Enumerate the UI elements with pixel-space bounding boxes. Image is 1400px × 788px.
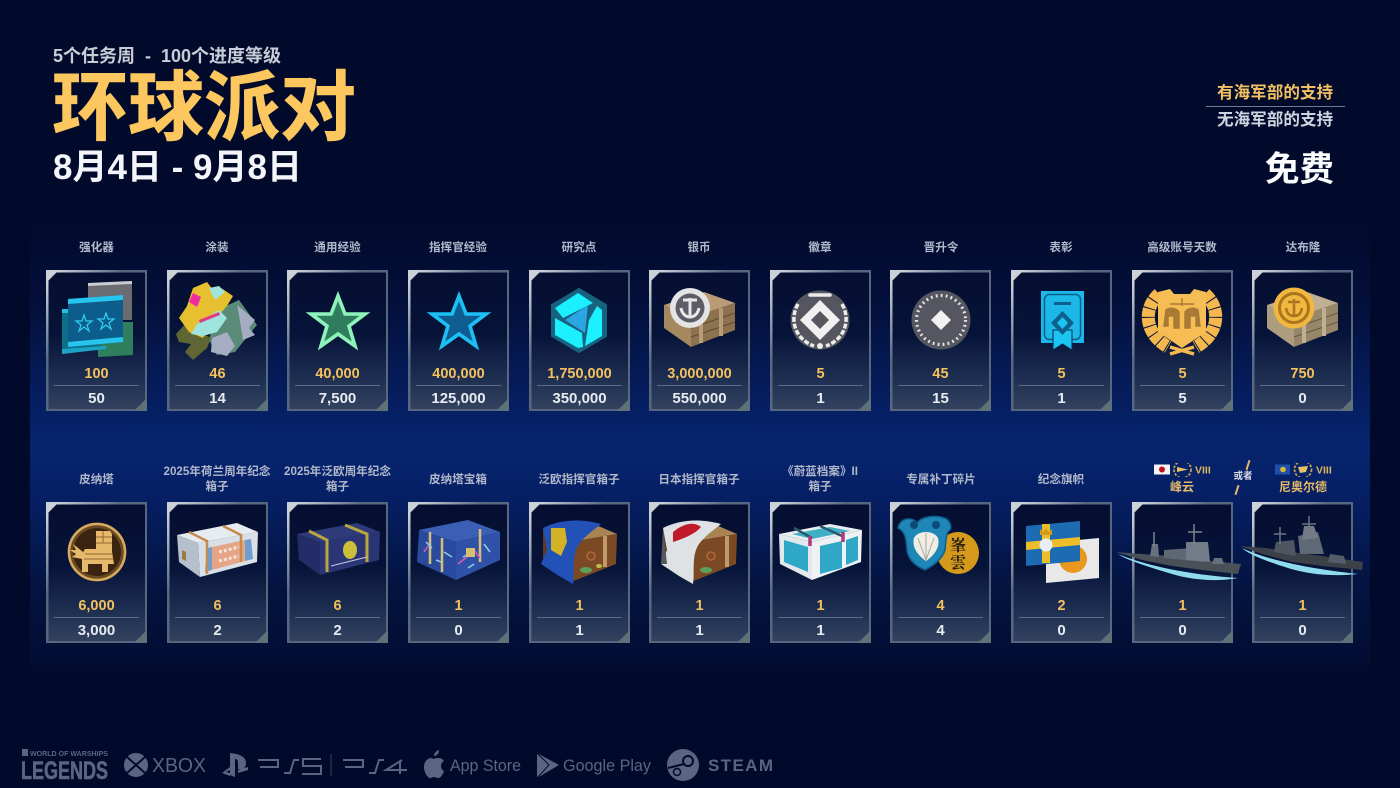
card: 峰云 xyxy=(1132,502,1233,643)
icon: premium laurel shield xyxy=(1142,289,1222,356)
card: 表彰 xyxy=(1011,270,1112,411)
value: with admiralty: 100 xyxy=(84,366,109,382)
value: free: 1 xyxy=(816,390,825,407)
label: 皮纳塔宝箱: 皮纳塔宝箱 xyxy=(429,472,487,486)
icon: Pan-European flag and tier: VIII xyxy=(1316,464,1332,476)
icon: Pan-European commander crate xyxy=(541,520,617,584)
icon: camouflage xyxy=(176,282,257,360)
logo: Steam: STEAM xyxy=(708,756,773,775)
icon: destroyer Minegumo xyxy=(1116,524,1241,580)
logo: World of Warships Legends: LEGENDS xyxy=(21,757,108,785)
label: 达布隆: 达布隆 xyxy=(1286,241,1320,254)
icon: commemorative flags xyxy=(1026,521,1099,583)
icon: pinata chest xyxy=(417,520,500,580)
value: free: 350,000 xyxy=(552,390,607,407)
value: free: 4 xyxy=(936,622,945,639)
value: free: 0 xyxy=(1178,622,1187,639)
value: free: 0 xyxy=(1298,622,1307,639)
label: 2025年荷兰周年纪念箱子 xyxy=(164,464,270,493)
card: 尼奥尔德 xyxy=(1252,502,1353,643)
value: free: 15 xyxy=(932,390,949,407)
value: with admiralty: 3,000,000 xyxy=(667,366,732,382)
value: with admiralty: 750 xyxy=(1290,366,1315,382)
icon: green star xyxy=(306,291,370,350)
value: with admiralty: 1 xyxy=(816,598,825,614)
value: with admiralty: 5 xyxy=(1057,366,1066,382)
date range: 8月4日 - 9月8日 xyxy=(53,148,302,187)
value: with admiralty: 6 xyxy=(213,598,222,614)
logo: PS5 and PS4 xyxy=(222,753,407,777)
label: 专属补丁碎片: 专属补丁碎片 xyxy=(906,472,976,486)
card: 皮纳塔 xyxy=(46,502,147,643)
card: 徽章 xyxy=(770,270,871,411)
label: 2025年泛欧周年纪念箱子 xyxy=(284,464,391,493)
card: 涂装 xyxy=(167,270,268,411)
legend: without admiralty: 无海军部的支持 xyxy=(1217,110,1333,129)
value: free: 0 xyxy=(1057,622,1066,639)
icon: credits crate xyxy=(664,288,736,347)
or text: 或者 xyxy=(1233,471,1252,482)
label: 2025年荷兰周年纪念箱子: 箱子 xyxy=(205,480,229,493)
card: 研究点 xyxy=(529,270,630,411)
card: 指挥官经验 xyxy=(408,270,509,411)
card: 泛欧指挥官箱子 xyxy=(529,502,630,643)
value: with admiralty: 40,000 xyxy=(315,366,360,382)
platform logos xyxy=(21,749,773,785)
legend: tier rows xyxy=(1206,83,1345,129)
background band xyxy=(30,215,1370,675)
legend: with admiralty: 有海军部的支持 xyxy=(1217,83,1333,102)
icon: blue star xyxy=(426,291,492,350)
icon: research hexagon xyxy=(551,288,607,353)
icon: cruiser Njord xyxy=(1240,516,1363,576)
label: 2025年荷兰周年纪念箱子: 2025年荷兰周年纪念 xyxy=(164,465,270,478)
icon: patch fragments xyxy=(897,516,979,574)
label: 指挥官经验: 指挥官经验 xyxy=(429,241,487,254)
value: with admiralty: 400,000 xyxy=(432,366,485,382)
icon: pinata coin xyxy=(68,522,126,582)
logo: App Store xyxy=(424,750,521,778)
value: with admiralty: 1 xyxy=(695,598,704,614)
logo: Xbox: XBOX xyxy=(152,755,206,777)
value: free: 5 xyxy=(1178,390,1187,407)
logo: Google Play xyxy=(537,753,651,778)
label: 高级账号天数: 高级账号天数 xyxy=(1147,241,1217,254)
logo: World of Warships Legends xyxy=(21,749,108,785)
logo: App Store: App Store xyxy=(450,756,521,775)
value: with admiralty: 46 xyxy=(209,366,226,382)
icon: boosters xyxy=(62,281,133,357)
card: 晋升令 xyxy=(890,270,991,411)
value: with admiralty: 6,000 xyxy=(78,598,115,614)
value: free: 14 xyxy=(209,390,226,407)
or divider xyxy=(1233,460,1252,496)
card: 纪念旗帜 xyxy=(1011,502,1112,643)
icon: emblem medal xyxy=(790,290,850,350)
value: with admiralty: 4 xyxy=(936,598,945,614)
label: 2025年泛欧周年纪念箱子: 2025年泛欧周年纪念 xyxy=(284,465,391,478)
label: 通用经验: 通用经验 xyxy=(314,241,361,254)
card: 《蔚蓝档案》II 箱子 xyxy=(770,502,871,643)
value: with admiralty: 5 xyxy=(1178,366,1187,382)
label: 表彰: 表彰 xyxy=(1049,241,1073,254)
value: with admiralty: 6 xyxy=(333,598,342,614)
icon: Japanese commander crate xyxy=(661,520,737,584)
icon: promotion order xyxy=(912,290,970,350)
card: 2025年荷兰周年纪念箱子 xyxy=(167,502,268,643)
icon: Dutch anniversary chest xyxy=(177,523,258,577)
label: 徽章: 徽章 xyxy=(808,241,832,254)
ship header: 峰云 xyxy=(1154,463,1211,494)
value: with admiralty: 1 xyxy=(454,598,463,614)
icon: Pan-European anniversary chest xyxy=(297,523,380,575)
label: 2025年泛欧周年纪念箱子: 箱子 xyxy=(326,480,349,493)
icon: Japan flag and tier: VIII xyxy=(1195,464,1211,476)
ship name: 尼奥尔德 xyxy=(1279,480,1327,494)
value: free: 7,500 xyxy=(319,390,356,407)
card: 达布隆 xyxy=(1252,270,1353,411)
icon: patch fragments: 雲 xyxy=(950,550,966,573)
card: 高级账号天数 xyxy=(1132,270,1233,411)
label: 银币: 银币 xyxy=(687,241,711,254)
value: free: 2 xyxy=(213,622,222,639)
free label: 免费 xyxy=(1265,151,1334,189)
label: 皮纳塔: 皮纳塔 xyxy=(79,472,114,486)
label: 纪念旗帜: 纪念旗帜 xyxy=(1038,472,1084,486)
icon: patch fragments: 峯 xyxy=(950,533,966,556)
card: 日本指挥官箱子 xyxy=(649,502,750,643)
value: free: 3,000 xyxy=(78,622,115,639)
value: free: 0 xyxy=(454,622,463,639)
value: free: 1 xyxy=(1057,390,1066,407)
value: free: 1 xyxy=(816,622,825,639)
value: with admiralty: 1 xyxy=(575,598,584,614)
value: with admiralty: 2 xyxy=(1057,598,1066,614)
label: 《蔚蓝档案》II 箱子 xyxy=(782,465,858,493)
card: 2025年泛欧周年纪念箱子 xyxy=(287,502,388,643)
card: 通用经验 xyxy=(287,270,388,411)
card: 专属补丁碎片 xyxy=(890,502,991,643)
icon: commendation certificate xyxy=(1041,291,1084,350)
value: free: 0 xyxy=(1298,390,1307,407)
ship name: 峰云 xyxy=(1170,480,1194,494)
label: 强化器: 强化器 xyxy=(79,241,114,254)
label: 涂装: 涂装 xyxy=(205,241,229,254)
icon: doubloons crate xyxy=(1267,288,1338,347)
value: with admiralty: 1 xyxy=(1178,598,1187,614)
value: with admiralty: 5 xyxy=(816,366,825,382)
title: 环球派对 xyxy=(52,66,356,151)
value: with admiralty: 45 xyxy=(932,366,949,382)
logo: Steam xyxy=(667,749,773,781)
label: 日本指挥官箱子: 日本指挥官箱子 xyxy=(658,472,740,486)
logo: Xbox xyxy=(124,753,206,777)
label: 研究点: 研究点 xyxy=(562,241,596,254)
value: free: 550,000 xyxy=(672,390,727,407)
icon: Pan-European flag and tier xyxy=(1275,463,1332,477)
label: 晋升令: 晋升令 xyxy=(924,241,958,254)
value: free: 1 xyxy=(695,622,704,639)
icon: Japan flag and tier xyxy=(1154,463,1211,477)
ship header: 尼奥尔德 xyxy=(1275,463,1332,494)
value: free: 50 xyxy=(88,390,105,407)
value: free: 125,000 xyxy=(431,390,486,407)
icon: Blue Archive chest xyxy=(779,524,862,580)
card: 皮纳塔宝箱 xyxy=(408,502,509,643)
label: 《蔚蓝档案》II 箱子: 箱子 xyxy=(808,480,832,493)
value: with admiralty: 1 xyxy=(1298,598,1307,614)
logo: Google Play: Google Play xyxy=(563,756,651,775)
value: free: 2 xyxy=(333,622,342,639)
logo: World of Warships Legends: WORLD OF WARSHIPS xyxy=(30,749,108,758)
value: free: 1 xyxy=(575,622,584,639)
label: 《蔚蓝档案》II 箱子: 《蔚蓝档案》II xyxy=(782,465,858,478)
label: 泛欧指挥官箱子: 泛欧指挥官箱子 xyxy=(538,472,620,486)
subtitle: 5个任务周 - 100个进度等级 xyxy=(53,46,281,66)
card: 强化器 xyxy=(46,270,147,411)
card: 银币 xyxy=(649,270,750,411)
value: with admiralty: 1,750,000 xyxy=(547,366,612,382)
